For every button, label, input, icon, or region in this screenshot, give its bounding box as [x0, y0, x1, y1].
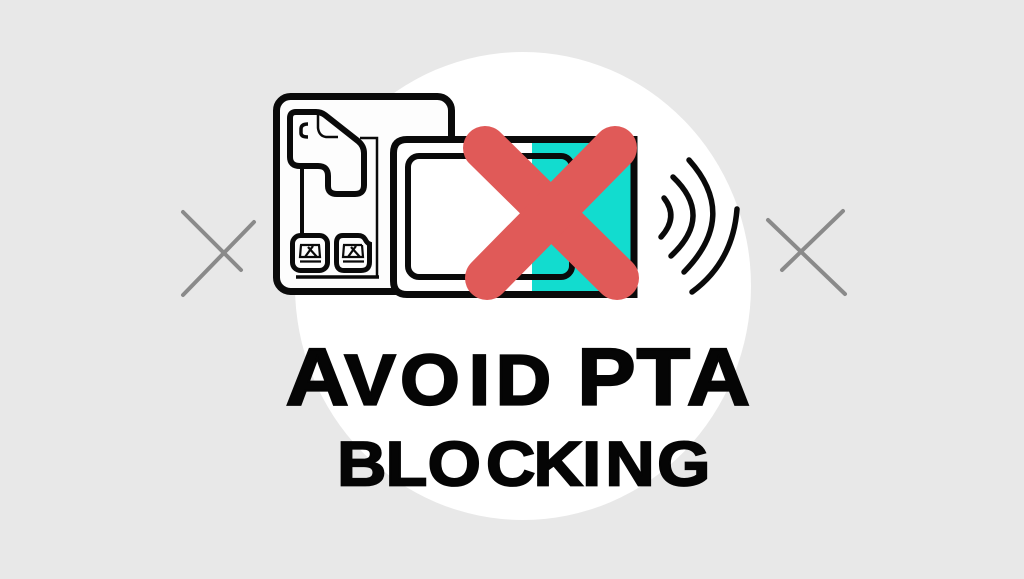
subtitle: Blocking: BLOCKING	[337, 429, 711, 500]
white background circle	[295, 52, 751, 520]
icon: left gray cross	[183, 212, 254, 295]
icon: device front card	[394, 140, 634, 294]
device outline	[394, 140, 634, 294]
title: Avoid PTA: PTA	[540, 331, 750, 422]
teal panel	[532, 142, 632, 292]
card outline	[276, 96, 452, 292]
chip corner marks	[301, 124, 308, 137]
icon: red cross	[485, 148, 617, 278]
small slot left	[292, 236, 328, 270]
title: Avoid PTA: A	[286, 331, 349, 422]
small slot left glyph	[300, 245, 321, 262]
SIM chip outline	[290, 112, 364, 194]
device screen outline	[408, 156, 572, 277]
icon: SIM card back	[276, 96, 452, 292]
icon: right gray cross	[768, 211, 845, 294]
white panel	[395, 142, 532, 292]
base line	[296, 275, 379, 279]
title: Avoid PTA: VOID	[345, 340, 551, 420]
small slot right	[336, 236, 370, 270]
small slot right glyph	[343, 245, 364, 262]
inner vertical guides	[360, 138, 377, 276]
icon: signal waves	[661, 160, 737, 292]
